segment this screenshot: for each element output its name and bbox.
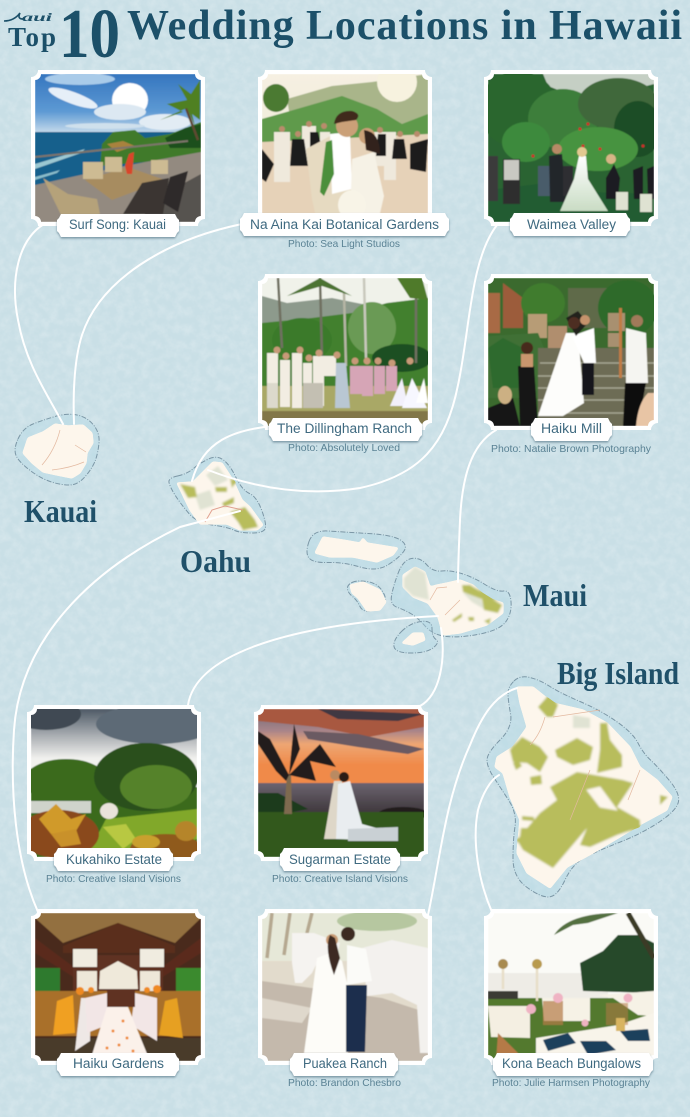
title text: Wedding Locations in Hawaii [127, 3, 682, 49]
map of Hawaiian islands [15, 414, 679, 897]
label: Sugarman Estate [280, 848, 400, 871]
label: Surf Song [57, 214, 179, 237]
credit: Brandon Chesbro: Photo: Brandon Chesbro [288, 1077, 401, 1089]
connector: Sugarman Estate to Maui [420, 628, 443, 706]
title word: Top: Top [8, 22, 56, 52]
photo: chapel aisle [35, 913, 201, 1061]
label: Puakea Ranch [290, 1053, 398, 1076]
logo: Maui script: aui [22, 10, 53, 24]
label: Waimea Valley: Waimea Valley [527, 217, 616, 232]
label: The Dillingham Ranch [269, 418, 422, 441]
credit: Creative Island Visions: Photo: Creative Island Visions [272, 873, 408, 885]
card: Kona Beach Bungalows [484, 909, 658, 1089]
label: Kukahiko Estate: Kukahiko Estate [66, 852, 162, 867]
photo: garden under trees [31, 709, 197, 857]
label: Kona Beach Bungalows: Kona Beach Bungalows [502, 1056, 641, 1071]
island: Lanai [347, 581, 386, 611]
photo: wedding party on beach [262, 74, 428, 213]
connector: Haiku Mill to Maui [458, 430, 496, 582]
photo: couple with white horse [262, 911, 428, 1061]
label: Na Aina Kai Botanical Gardens [240, 213, 449, 236]
credit: Sea Light Studios: Photo: Sea Light Studios [288, 238, 400, 250]
title [4, 0, 682, 73]
connector: Kona Beach Bungalows to Big Island [476, 775, 499, 912]
photo: beach reception tables [488, 913, 654, 1061]
connector: Kukahiko Estate to Maui [188, 616, 438, 705]
label: Kona Beach Bungalows [493, 1053, 653, 1076]
card: Waimea Valley [478, 70, 662, 236]
credit: Absolutely Loved: Photo: Absolutely Loved [288, 442, 400, 454]
credit: Creative Island Visions: Photo: Creative Island Visions [46, 873, 181, 885]
card: Puakea Ranch [258, 909, 432, 1089]
label: Waimea Valley [510, 213, 630, 236]
label: Haiku Gardens: Haiku Gardens [73, 1056, 164, 1071]
connector: Waimea Valley to Oahu [208, 225, 497, 491]
island: Kahoolawe [394, 621, 438, 653]
label: Puakea Ranch: Puakea Ranch [303, 1056, 387, 1071]
label: Na Aina Kai Botanical Gardens: Na Aina Kai Botanical Gardens [250, 217, 439, 232]
credit: Natalie Brown Photography: Photo: Natalie Brown Photography [491, 443, 652, 455]
card: Kukahiko Estate [27, 705, 201, 882]
card: Surf Song [31, 70, 205, 237]
label: The Dillingham Ranch: The Dillingham Ranch [277, 421, 412, 436]
label: Surf Song: Surf Song: Kauai [69, 217, 166, 232]
label: Kukahiko Estate [54, 848, 173, 871]
photo: oceanfront deck [35, 73, 201, 222]
label: Haiku Gardens [57, 1053, 179, 1076]
connector: Haiku Gardens to Oahu [13, 511, 240, 912]
card: Haiku Gardens [31, 909, 205, 1076]
island: Kauai [15, 414, 99, 485]
photo: stone steps ceremony [488, 278, 658, 426]
connector: Dillingham Ranch to Oahu [192, 426, 272, 481]
label: Sugarman Estate: Sugarman Estate [289, 852, 391, 867]
photo: sunset couple [258, 709, 428, 857]
island: Molokai [307, 531, 405, 569]
island name: Kauai: Kauai [24, 493, 97, 529]
logo: Maui script [4, 10, 53, 24]
card: Sugarman Estate [254, 705, 428, 885]
credit: Julie Harmsen Photography: Photo: Julie Harmsen Photography [492, 1077, 651, 1089]
card: The Dillingham Ranch [258, 274, 432, 454]
island name: Oahu: Oahu [180, 543, 251, 579]
photo: garden ceremony [488, 74, 654, 222]
island name: Maui: Maui [523, 577, 587, 613]
island: Maui [391, 558, 511, 637]
photo: wedding party under palms [262, 278, 432, 426]
label: Haiku Mill [531, 418, 612, 441]
connector: Na Aina Kai to Kauai [74, 224, 242, 424]
island: Oahu [169, 457, 266, 533]
connector: Puakea Ranch to Big Island [428, 688, 517, 915]
card: Na Aina Kai Botanical Gardens [240, 62, 449, 250]
connector: Surf Song to Kauai [15, 224, 63, 424]
card: Haiku Mill [484, 274, 658, 455]
island: Big Island [487, 677, 679, 897]
label: Haiku Mill: Haiku Mill [541, 421, 602, 436]
